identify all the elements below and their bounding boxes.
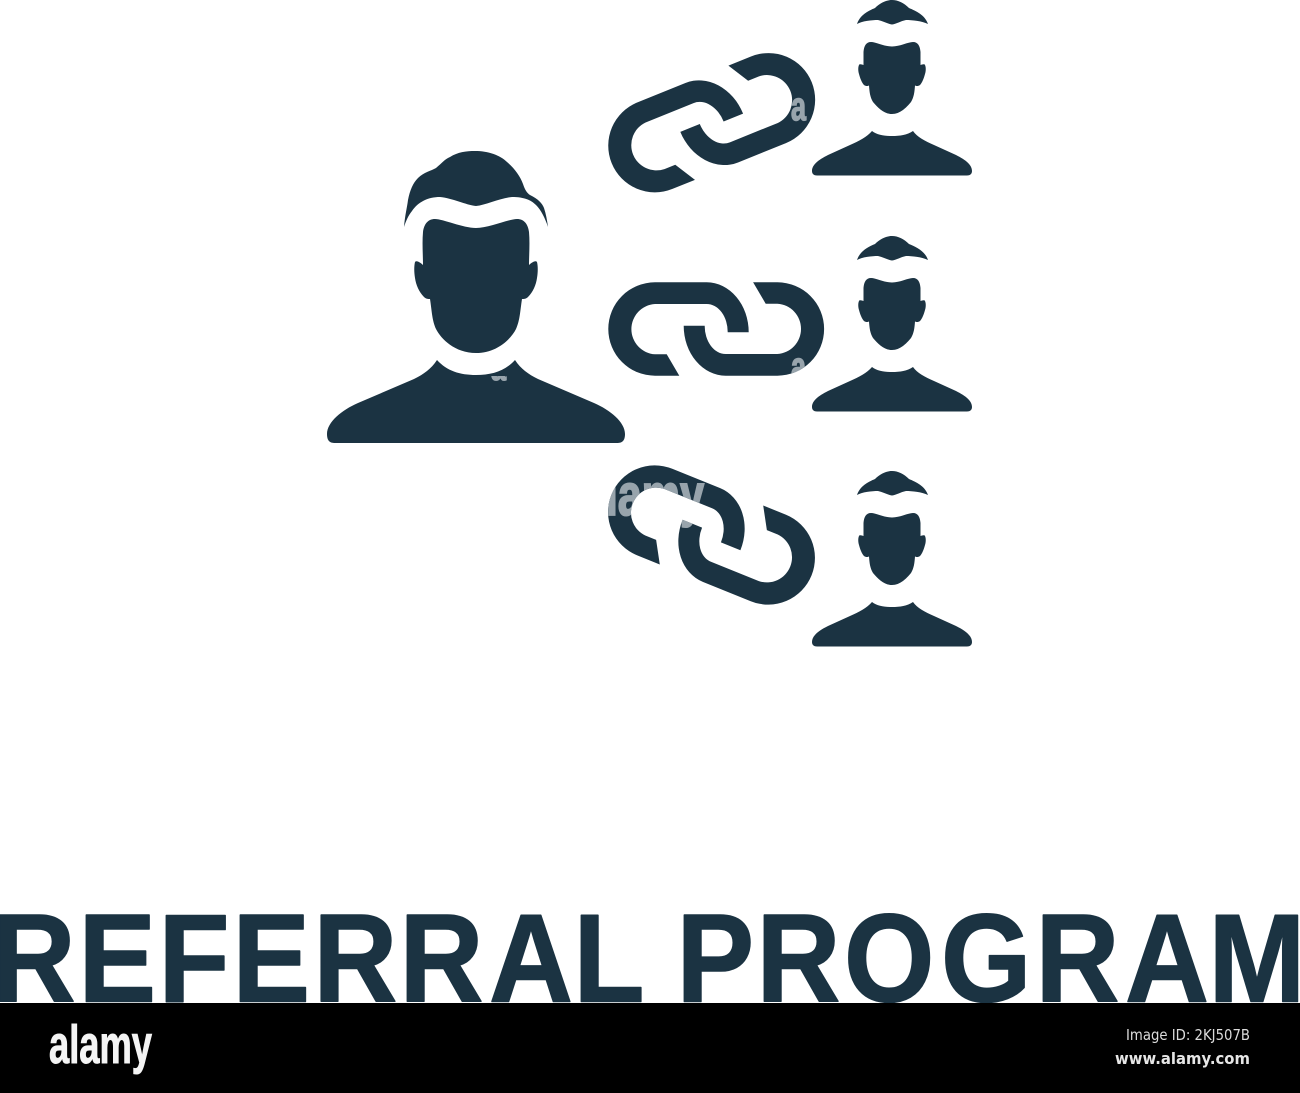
- icon: chain link bottom: [608, 465, 815, 605]
- watermark fragment on large body: a: [491, 350, 507, 388]
- icon: referred person bottom: [812, 471, 972, 646]
- watermark fragment on middle link: a: [791, 345, 807, 389]
- watermark fragment on bottom link: alamy: [582, 463, 704, 528]
- icon: referrer person: [327, 151, 625, 443]
- icon: chain link top: [608, 53, 816, 192]
- website: www.alamy.com: [1115, 1049, 1250, 1068]
- alamy logo: alamy: [49, 1015, 152, 1075]
- icon: referred person middle: [812, 236, 972, 412]
- image id: Image ID: 2KJ507B: [1126, 1026, 1250, 1044]
- icon: chain link middle: [608, 282, 824, 376]
- footer bar: [0, 1003, 1300, 1093]
- icon: referred person top: [812, 0, 972, 176]
- title: REFERRAL PROGRAM: [0, 889, 1300, 1028]
- watermark fragment on top link: a: [791, 85, 807, 129]
